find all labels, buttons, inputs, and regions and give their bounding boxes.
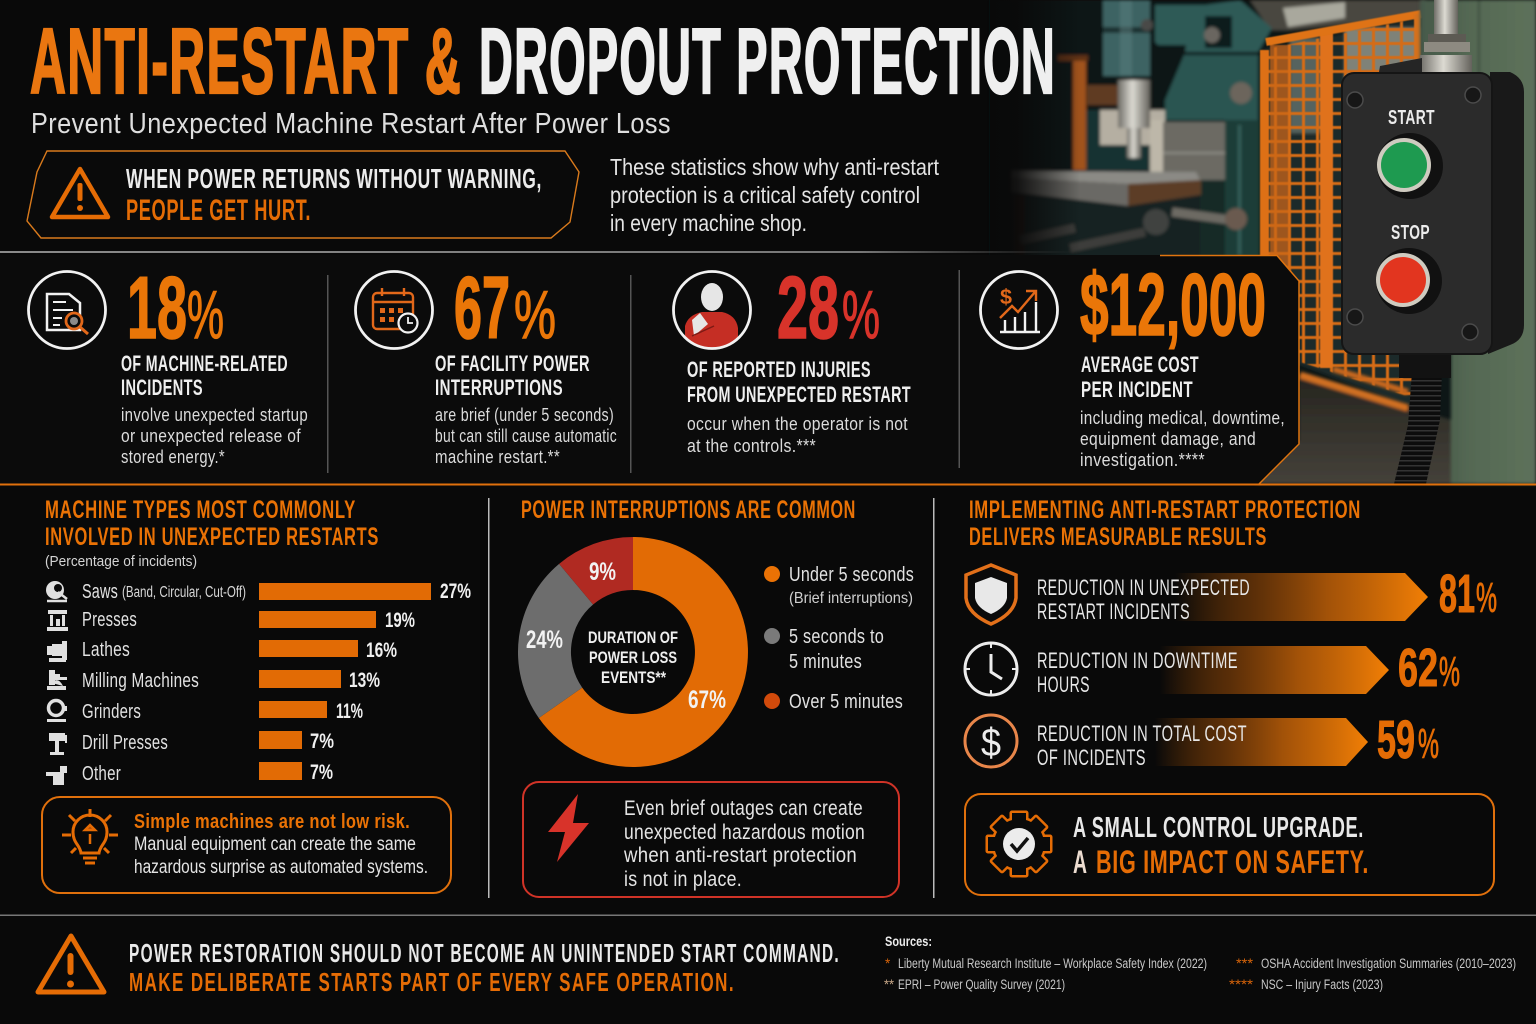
bar values: 7%: [310, 761, 333, 784]
icon: injured worker: [674, 272, 750, 350]
icon: calendar with clock: [356, 272, 432, 348]
intro text: protection is a critical safety control: [610, 182, 920, 208]
result values: %: [1476, 574, 1497, 621]
stat: 28%: 28: [777, 258, 839, 357]
stat: 18%: involve unexpected startup: [121, 404, 308, 425]
stat: 67%: %: [514, 277, 556, 353]
fade from photo to black: [990, 0, 1080, 484]
icon: dollar: [965, 715, 1017, 767]
labels: (Band, Circular, Cut-Off): [122, 584, 246, 601]
callout: simple machines: Manual equipment can create the same: [134, 834, 416, 855]
stat: 67%: machine restart.**: [435, 446, 560, 467]
sources: ***: [1236, 956, 1254, 971]
sources: Liberty Mutual Research Institute – Workplace Safety Index (2022): [898, 956, 1207, 971]
icon: clock: [965, 643, 1017, 695]
donut chart: 67%: [688, 686, 726, 714]
result values: 59: [1377, 710, 1415, 770]
labels: Presses: [82, 609, 137, 631]
callout: warning banner: [27, 151, 579, 238]
donut chart: [518, 537, 748, 767]
table: [1012, 171, 1201, 184]
stat: 28%: occur when the operator is not: [687, 413, 908, 434]
icon: rising cost chart: [980, 272, 1058, 348]
stat: 18%: OF MACHINE-RELATED: [121, 351, 288, 376]
icon: rising cost chart: $: [1000, 286, 1012, 309]
stat: 18%: INCIDENTS: [121, 375, 203, 400]
result values: 62: [1398, 638, 1438, 698]
panel: power interruptions: [518, 496, 914, 897]
stat: 67%: are brief (under 5 seconds): [435, 404, 614, 425]
red stop button: [1376, 248, 1442, 314]
stat: $12,000: equipment damage, and: [1080, 428, 1256, 449]
icon: warning triangle: [52, 169, 108, 217]
row text: OF INCIDENTS: [1037, 745, 1146, 770]
stat: 67%: INTERRUPTIONS: [435, 375, 563, 400]
stat: 18%: stored energy.*: [121, 446, 225, 467]
bar values: 7%: [310, 730, 334, 753]
wall: [1420, 0, 1536, 484]
heading: DELIVERS MEASURABLE RESULTS: [969, 523, 1267, 551]
row text: REDUCTION IN DOWNTIME: [1037, 648, 1238, 673]
title: ANTI-RESTART &: [30, 9, 462, 113]
spindle: [1118, 80, 1150, 128]
heading: MACHINE TYPES MOST COMMONLY: [45, 496, 356, 524]
sources: Sources:: [885, 934, 932, 949]
callout text: [126, 163, 542, 227]
bar values: 16%: [366, 639, 397, 662]
heading: [45, 496, 379, 570]
sources: EPRI – Power Quality Survey (2021): [898, 977, 1065, 992]
donut chart: 24%: [526, 626, 563, 654]
heading: [969, 496, 1361, 551]
subtitle: Prevent Unexpected Machine Restart After Power Loss: [31, 108, 671, 140]
arrows: [1155, 573, 1428, 766]
label: start: START: [1388, 107, 1435, 129]
stat: 28%: at the controls.***: [687, 435, 816, 456]
callout text: PEOPLE GET HURT.: [126, 194, 311, 227]
panel: results: [965, 496, 1497, 895]
label: stop: STOP: [1391, 222, 1430, 244]
result values: [1377, 564, 1497, 770]
bottom conduit: [1394, 346, 1451, 484]
photo: machine shop with control station: [990, 0, 1536, 484]
back orange post: [1073, 55, 1086, 170]
donut chart: EVENTS**: [601, 668, 666, 687]
footer message: [129, 938, 840, 997]
stat: $12,000: PER INCIDENT: [1081, 377, 1193, 402]
back teal parts: [1086, 110, 1156, 170]
stat: 67%: OF FACILITY POWER: [435, 351, 590, 376]
green start button: [1377, 133, 1443, 199]
legend: Over 5 minutes: [789, 691, 903, 713]
stat: 18%: [28, 258, 308, 467]
labels: Saws: [82, 581, 118, 603]
bar values: 27%: [440, 580, 471, 603]
callout: big impact: A: [1073, 844, 1087, 880]
panel: machine types: [42, 496, 471, 893]
sources: [884, 934, 1516, 992]
labels: Milling Machines: [82, 670, 199, 692]
stat: $12,000: investigation.****: [1080, 449, 1205, 470]
result values: %: [1439, 648, 1460, 695]
icon: light bulb: [62, 809, 118, 863]
sources: **: [884, 977, 895, 992]
legend: Under 5 seconds: [789, 564, 914, 586]
intro text: These statistics show why anti-restart: [610, 154, 940, 180]
icon: lightning bolt: [548, 794, 589, 862]
stat: 18%: or unexpected release of: [121, 425, 301, 446]
icon: footer warning: [38, 936, 104, 992]
legend: [764, 564, 914, 713]
stat: 28%: [674, 258, 911, 456]
floor: [1255, 375, 1452, 484]
stat: 28%: FROM UNEXPECTED RESTART: [687, 382, 911, 407]
stat: $12,000: including medical, downtime,: [1080, 407, 1285, 428]
result values: %: [1418, 720, 1439, 767]
heading: POWER INTERRUPTIONS ARE COMMON: [521, 496, 856, 524]
top conduit: [1378, 0, 1472, 78]
icons: machine types: [46, 581, 68, 785]
row text: REDUCTION IN UNEXPECTED: [1037, 575, 1250, 600]
stat: 18%: %: [187, 277, 224, 353]
donut chart: POWER LOSS: [589, 648, 677, 667]
icon: document with magnifier: [28, 272, 106, 348]
callout: big impact: BIG IMPACT ON SAFETY.: [1096, 844, 1369, 880]
callout: brief outages: Even brief outages can create: [624, 797, 863, 820]
fence mesh: [1260, 14, 1421, 400]
sources: NSC – Injury Facts (2023): [1261, 977, 1383, 992]
panel: statistics: [0, 251, 1299, 484]
labels: Other: [82, 763, 121, 785]
stat: $12,000: AVERAGE COST: [1081, 352, 1199, 377]
ceiling: [1250, 0, 1425, 30]
icon: gear with check: [988, 813, 1050, 875]
callout: simple machines: hazardous surprise as automated systems.: [134, 857, 428, 878]
legend: 5 seconds to: [789, 626, 884, 648]
callout text: WHEN POWER RETURNS WITHOUT WARNING,: [126, 163, 542, 194]
legend: (Brief interruptions): [789, 590, 913, 607]
callout: brief outages: is not in place.: [624, 868, 742, 891]
donut chart: 9%: [589, 558, 616, 586]
heading: (Percentage of incidents): [45, 553, 197, 570]
screws: [1347, 87, 1481, 340]
stat: 18%: 18: [127, 258, 187, 357]
work block: [1162, 122, 1225, 180]
footer: [38, 934, 1516, 997]
bar values: 11%: [336, 700, 363, 723]
donut chart: DURATION OF: [588, 628, 678, 647]
footer message: MAKE DELIBERATE STARTS PART OF EVERY SAFE OPERATION.: [129, 967, 735, 997]
feed handles: [1020, 228, 1145, 248]
bar values: 13%: [349, 669, 380, 692]
labels: Drill Presses: [82, 732, 168, 754]
stat: 28%: OF REPORTED INJURIES: [687, 357, 871, 382]
result values: 81: [1439, 564, 1475, 624]
sources: *: [885, 956, 891, 971]
row text: [1037, 575, 1250, 770]
stat: $12,000: [980, 255, 1285, 470]
labels: Lathes: [82, 639, 130, 661]
labels: [82, 581, 246, 785]
legend: 5 minutes: [789, 651, 862, 673]
bar chart: [259, 583, 431, 780]
intro text: in every machine shop.: [610, 210, 807, 236]
callout: brief outages: [523, 782, 899, 897]
control station: [1342, 72, 1524, 354]
heading: INVOLVED IN UNEXPECTED RESTARTS: [45, 523, 379, 551]
footer message: POWER RESTORATION SHOULD NOT BECOME AN UNINTENDED START COMMAND.: [129, 938, 840, 968]
callout: big impact: [965, 794, 1494, 895]
machine column: [1103, 0, 1150, 76]
row text: RESTART INCIDENTS: [1037, 599, 1190, 624]
icon: shield: [966, 565, 1016, 624]
stat: $12,000: $12,000: [1080, 255, 1266, 354]
stat: 67%: [356, 258, 617, 467]
row text: REDUCTION IN TOTAL COST: [1037, 721, 1247, 746]
bar values: 19%: [385, 609, 415, 632]
callout: simple machines: Simple machines are not low risk.: [134, 811, 410, 833]
stat: 28%: %: [842, 277, 880, 353]
stat: 67%: 67: [454, 258, 510, 357]
icon: dollar: $: [981, 721, 1001, 765]
intro text: [610, 154, 940, 236]
machine head: [1155, 0, 1272, 52]
labels: Grinders: [82, 701, 141, 723]
fence backdrop: [1262, 18, 1420, 410]
row text: HOURS: [1037, 672, 1090, 697]
callout: simple machines: [42, 797, 451, 893]
callout: brief outages: unexpected hazardous motion: [624, 821, 865, 844]
stat: 67%: but can still cause automatic: [435, 425, 617, 446]
bar values: [310, 580, 471, 784]
sources: ****: [1229, 977, 1254, 992]
callout: big impact: A SMALL CONTROL UPGRADE.: [1073, 812, 1364, 844]
callout: brief outages: when anti-restart protection: [623, 844, 857, 867]
